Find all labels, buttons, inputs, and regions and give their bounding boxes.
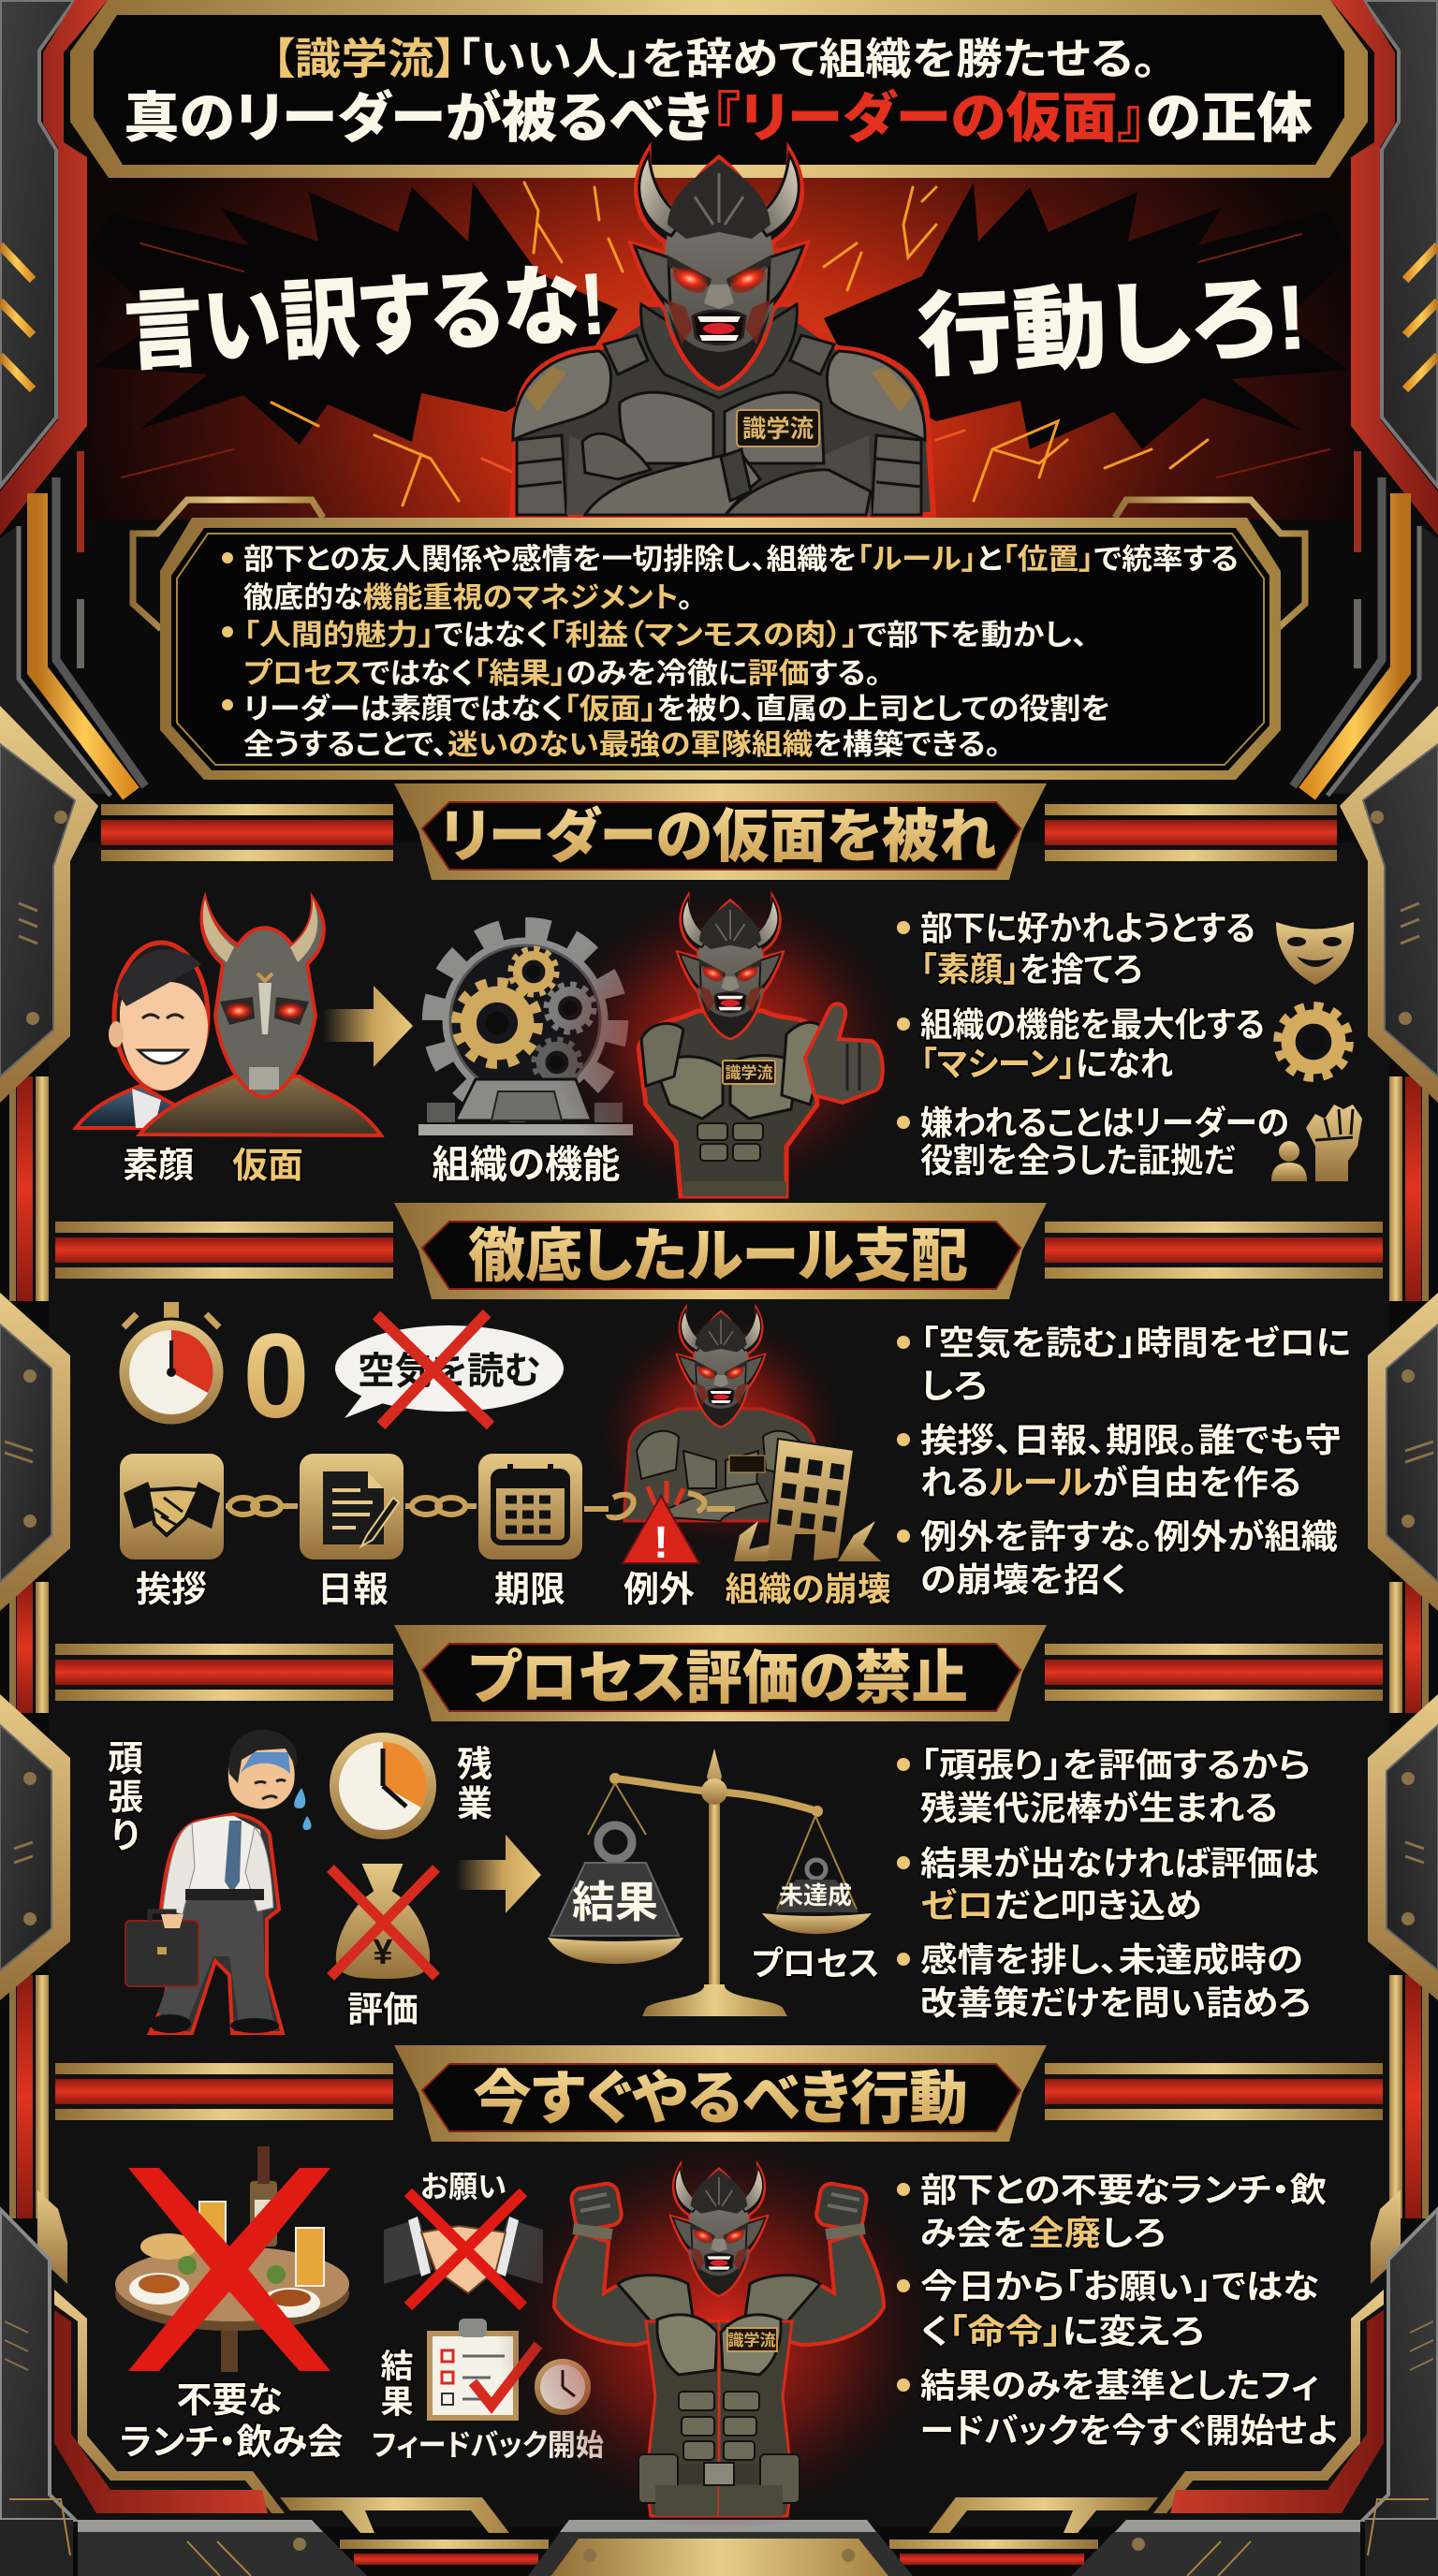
section 3 bullets: 感情を排し、未達成時の	[920, 1940, 1303, 1979]
summary text: リーダーは素顔ではなく 「仮面」を被り、直属の上司としての役割を	[243, 693, 1110, 725]
label: effort vertical: 頑	[108, 1740, 143, 1779]
section 2 bullets: の崩壊を招く	[920, 1560, 1127, 1599]
demon pointing: 識学流	[725, 1063, 773, 1082]
label: result vertical: 果	[380, 2384, 414, 2421]
section 4 bullets: 部下との不要なランチ・飲	[920, 2171, 1327, 2209]
balance scale: 未達成	[779, 1881, 852, 1910]
warning sign: !	[653, 1518, 668, 1568]
section 3 bullets: 結果が出なければ評価は	[920, 1844, 1319, 1882]
section 3 bullets: ゼロだと叩き込め	[920, 1886, 1202, 1925]
burst left	[89, 183, 618, 445]
label: unnecessary lunch	[120, 2381, 343, 2463]
demon glow s1	[552, 885, 908, 1203]
section banner 4: 今すぐやるべき行動	[473, 2067, 968, 2131]
section 4 bullets: み会を全廃しろ	[920, 2214, 1166, 2252]
summary text: 「人間的魅力」 ではなく 「利益（マンモスの肉）」 で部下を動かし、	[243, 619, 1088, 651]
demon glow s4	[496, 2130, 946, 2532]
label: effort vertical: り	[111, 1817, 139, 1856]
label: unnecessary lunch: ランチ・飲み会	[120, 2423, 343, 2463]
human face	[76, 943, 215, 1128]
section 1 bullets: 「マシーン」になれ	[920, 1045, 1173, 1083]
section banner 1: リーダーの仮面を被れ	[440, 804, 996, 870]
table crossed out	[115, 2146, 349, 2372]
label: request: お願い	[420, 2170, 506, 2203]
section 3 bullets: 改善策だけを問い詰めろ	[920, 1983, 1311, 2022]
section 2 bullets: 挨拶、日報、期限。誰でも守	[920, 1421, 1342, 1459]
content panel background	[49, 842, 1389, 2527]
label: overtime vertical: 残	[457, 1746, 492, 1785]
section banner 3	[55, 1625, 1383, 1721]
label: organization function: 組織の機能	[433, 1143, 620, 1186]
speech bubble crossed out: 空気を読む	[358, 1351, 541, 1392]
section 1 bullets: 役割を全うした証拠だ	[920, 1141, 1236, 1179]
labels: rule row: 期限	[494, 1571, 565, 1610]
section 4 bullets: 今日から「お願い」ではな	[920, 2267, 1319, 2305]
label: result vertical	[380, 2349, 414, 2421]
section banner 4	[55, 2045, 1383, 2142]
section 2 bullets	[897, 1324, 1351, 1599]
hero demon head	[631, 150, 807, 388]
speech bubble crossed out	[335, 1313, 564, 1426]
section banner 2	[55, 1203, 1383, 1299]
zero: 0	[242, 1310, 310, 1443]
demon mask	[202, 899, 324, 1097]
money bag crossed	[330, 1863, 436, 1980]
section 3 bullets: 残業代泥棒が生まれる	[920, 1789, 1278, 1827]
icon card: handshake	[119, 1453, 225, 1560]
section 4 bullets	[897, 2171, 1338, 2450]
broken sparks	[648, 1481, 683, 1505]
section 1 illustration: faces	[76, 899, 381, 1135]
handshake crossed	[384, 2192, 543, 2306]
section 1 bullets	[897, 909, 1289, 1179]
hero demon body	[512, 304, 933, 515]
summary text: 全うすることで、 迷いのない最強の軍隊組織 を構築できる。	[243, 728, 1001, 761]
arrow s3	[456, 1835, 541, 1913]
hero slogan left: 言い訳するな!	[122, 254, 609, 382]
section 2 stopwatch	[118, 1302, 225, 1426]
label: feedback start: フィードバック開始	[372, 2428, 604, 2462]
section 1 bullets: 「素顔」を捨てろ	[920, 950, 1142, 988]
section 2 bullets: 例外を許すな。例外が組織	[920, 1517, 1338, 1556]
warning sign	[623, 1496, 699, 1568]
icon: mask	[1276, 922, 1354, 985]
summary text: 徹底的な機能重視のマネジメント 。	[243, 581, 693, 614]
label: unnecessary lunch: 不要な	[176, 2381, 283, 2421]
balance scale: 結果	[572, 1878, 658, 1926]
label: effort vertical: 張	[108, 1778, 143, 1818]
labels: rule row: 挨拶	[136, 1571, 207, 1610]
title plate	[70, 0, 1368, 178]
labels: rule row: 例外	[624, 1571, 695, 1610]
demon flexing	[554, 2182, 884, 2516]
section 2 bullets: しろ	[920, 1367, 987, 1405]
section 3 bullets: 「頑張り」を評価するから	[920, 1746, 1311, 1784]
label: effort vertical	[108, 1740, 143, 1856]
label: overtime vertical	[457, 1746, 492, 1824]
labels: rule row: 組織の崩壊	[725, 1570, 891, 1608]
chest patch	[737, 410, 819, 446]
section 3 bullets	[897, 1746, 1319, 2022]
hero background	[87, 168, 1351, 520]
summary text: プロセスではなく「結果」のみを冷徹に 評価する。	[243, 657, 881, 690]
arrow	[323, 986, 413, 1067]
section banner 1	[101, 783, 1337, 880]
chest patch: 識学流	[742, 415, 814, 443]
tired man	[125, 1730, 311, 2033]
overtime clock	[329, 1732, 437, 1840]
title line 1: 【識学流】 「いい人」を辞めて組織を勝たせる。	[271, 35, 1156, 83]
labels: rule row: 日報	[317, 1571, 389, 1610]
label: overtime vertical: 業	[457, 1785, 492, 1824]
summary text	[243, 543, 1239, 761]
labels: rule row	[136, 1570, 891, 1610]
icon: gear	[1278, 1006, 1349, 1077]
demon flexing: 識学流	[728, 2331, 775, 2349]
demon head s2	[677, 1308, 765, 1427]
right side frame	[889, 0, 1438, 2576]
section banner 3: プロセス評価の禁止	[468, 1647, 968, 1711]
label: mask: 仮面	[232, 1147, 303, 1186]
demon head s4	[670, 2164, 768, 2296]
hero slogan right: 行動しろ!	[915, 265, 1310, 388]
section 4 bullets: ードバックを今すぐ開始せよ	[920, 2411, 1338, 2450]
left side frame	[0, 0, 549, 2576]
section 1 bullets: 組織の機能を最大化する	[920, 1005, 1265, 1044]
section 4 bullets: 結果のみを基準としたフィ	[920, 2366, 1319, 2405]
label: evaluation: 評価	[347, 1991, 418, 2030]
money bag crossed: ¥	[373, 1933, 393, 1972]
section banner 2: 徹底したルール支配	[468, 1224, 968, 1289]
icon: fist and person	[1271, 1105, 1362, 1181]
demon glow s2	[594, 1310, 847, 1554]
collapsing building	[734, 1439, 881, 1561]
mask body	[139, 1076, 381, 1135]
label: bare face: 素顔	[123, 1147, 194, 1186]
label: result vertical: 結	[380, 2349, 414, 2385]
section 2 bullets: れるルールが自由を作る	[920, 1463, 1301, 1501]
summary panel	[133, 500, 1305, 780]
section 4 bullets: く「命令」 に変えろ	[920, 2312, 1204, 2350]
icon card: calendar	[477, 1453, 583, 1560]
balance scale	[548, 1749, 872, 2016]
demon head s1	[678, 896, 783, 1039]
section 1 bullets: 部下に好かれようとする	[920, 909, 1255, 947]
bottom centre plate	[528, 2520, 913, 2576]
section 1 bullets: 嫌われることはリーダーの	[920, 1104, 1289, 1142]
clipboard with check	[427, 2319, 538, 2421]
chain links	[225, 1493, 735, 1517]
section 2 bullets: 「空気を読む」時間をゼロに	[920, 1324, 1351, 1362]
label: process: プロセス	[751, 1944, 880, 1983]
title line 2: 真のリーダーが被るべき 『リーダーの仮面』の正体	[124, 88, 1313, 149]
summary text: 部下との友人関係や感情を一切排除し、組織を 「ルール」と「位置」で統率する	[243, 543, 1239, 576]
icon card: report	[299, 1453, 404, 1560]
machine gear	[418, 929, 634, 1136]
lava cracks	[122, 183, 1329, 505]
summary bullet dots	[222, 552, 233, 710]
small clock	[534, 2358, 592, 2416]
burst right	[824, 183, 1350, 449]
demon pointing	[638, 1003, 883, 1196]
demon crossed arms	[624, 1409, 817, 1521]
